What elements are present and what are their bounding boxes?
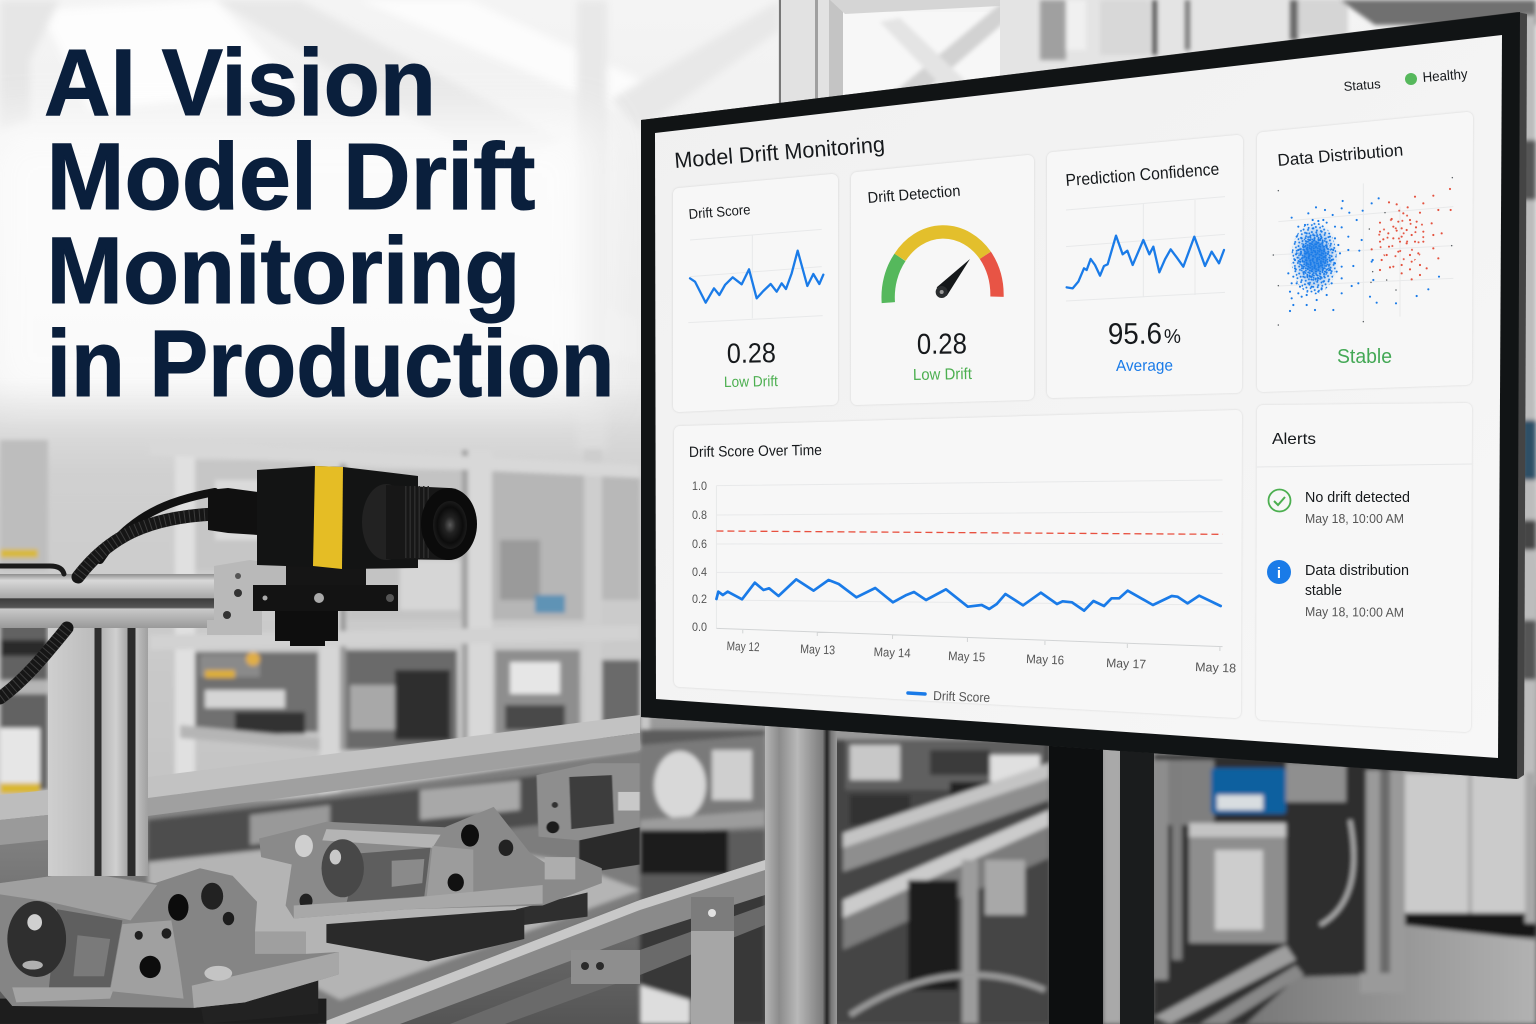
monitor frame — [641, 12, 1527, 779]
panel: alerts — [1257, 409, 1472, 726]
panel: drift score over time: Drift Score Over Time — [689, 442, 822, 461]
camera body — [257, 466, 418, 569]
alert threshold — [716, 531, 1223, 534]
y axis labels: 0.0 — [692, 620, 707, 634]
structural column below monitor — [765, 725, 837, 1024]
x axis labels — [726, 639, 1236, 676]
alert: data stable: i — [1277, 565, 1281, 582]
y axis labels — [692, 479, 707, 634]
confidence value: 95.6 — [1108, 318, 1162, 351]
legend — [908, 688, 990, 705]
panel: alerts: Alerts — [1272, 431, 1316, 448]
camera mounting rail — [0, 574, 215, 876]
panel: drift detection: 0.28 — [917, 328, 967, 361]
alert: data stable — [1267, 560, 1409, 620]
metal casting: middle — [259, 807, 602, 961]
y axis labels: 0.6 — [692, 537, 707, 551]
camera mount — [253, 565, 398, 646]
confidence value: % — [1164, 326, 1181, 348]
status indicator — [1343, 66, 1468, 94]
panel: drift detection — [857, 161, 1028, 399]
conveyor rails — [318, 860, 765, 1024]
alert: no drift: No drift detected — [1305, 490, 1410, 506]
x axis labels: May 13 — [800, 642, 835, 657]
alert: no drift — [1268, 490, 1410, 526]
monitor screen — [655, 35, 1502, 758]
y axis labels: 0.2 — [692, 592, 707, 606]
panel: drift score: 0.28 — [727, 337, 776, 369]
vertical aluminium post — [48, 628, 148, 876]
panel: drift detection: Low Drift — [913, 366, 973, 384]
main title: Model Drift — [46, 124, 536, 230]
y axis labels: 1.0 — [692, 479, 707, 493]
background: lower right machinery — [830, 740, 1536, 1024]
alert: data stable: May 18, 10:00 AM — [1305, 604, 1404, 620]
background: right margin behind monitor — [1522, 15, 1536, 785]
x axis labels: May 18 — [1195, 660, 1236, 676]
alert: data stable: stable — [1305, 583, 1342, 599]
horizontal safety rail — [0, 715, 640, 845]
panel: drift score: Drift Score — [688, 201, 751, 222]
x axis labels: May 12 — [726, 639, 760, 654]
panel: prediction confidence: Prediction Confidence — [1065, 159, 1220, 190]
camera connectors — [208, 488, 258, 535]
background: blurred machine enclosures — [0, 380, 650, 810]
background: glow behind the title — [0, 120, 600, 410]
industrial camera — [207, 466, 477, 646]
panel: drift score: Low Drift — [724, 373, 779, 391]
panel: drift score over time — [680, 416, 1236, 712]
x axis labels: May 17 — [1106, 656, 1146, 672]
panel: drift detection: Drift Detection — [867, 183, 961, 207]
panel: data distribution: Stable — [1337, 346, 1392, 368]
legend: Drift Score — [933, 688, 990, 705]
main title: Monitoring — [46, 218, 520, 324]
alert: no drift: May 18, 10:00 AM — [1305, 511, 1404, 526]
confidence sparkline — [1067, 236, 1224, 288]
background: conveyor bed — [148, 730, 765, 1024]
dashboard title: Model Drift Monitoring — [673, 132, 886, 173]
main title — [44, 30, 614, 417]
camera lens — [362, 484, 477, 560]
x axis labels: May 14 — [873, 645, 911, 660]
cable — [0, 492, 215, 698]
monitor stand poles — [1049, 740, 1154, 1024]
panel: data distribution: Data Distribution — [1277, 141, 1404, 170]
camera yellow band — [313, 466, 343, 569]
alert: data stable: Data distribution — [1305, 563, 1409, 579]
drift score sparkline — [690, 251, 823, 303]
status indicator: Healthy — [1422, 66, 1468, 85]
x axis labels: May 15 — [948, 649, 985, 664]
y axis labels: 0.4 — [692, 565, 707, 579]
background: column and skylight above monitor — [778, 0, 1536, 110]
main title: in Production — [46, 311, 614, 417]
x axis labels: May 16 — [1026, 652, 1064, 667]
camera bracket — [207, 560, 290, 635]
drift score series — [716, 579, 1221, 611]
panel: prediction confidence — [1053, 141, 1237, 392]
metal casting: far — [537, 763, 640, 874]
status indicator: Status — [1343, 76, 1382, 94]
metal casting: foreground — [0, 868, 339, 1024]
y axis labels: 0.8 — [692, 508, 707, 522]
main title: AI Vision — [44, 30, 436, 136]
line chart — [716, 480, 1223, 651]
panel: drift score — [679, 180, 832, 406]
panel: data distribution — [1263, 118, 1467, 386]
panel: prediction confidence: Average — [1116, 358, 1173, 375]
scatter plot — [1272, 178, 1453, 325]
background: ceiling beams — [0, 0, 780, 450]
gauge — [888, 232, 997, 303]
